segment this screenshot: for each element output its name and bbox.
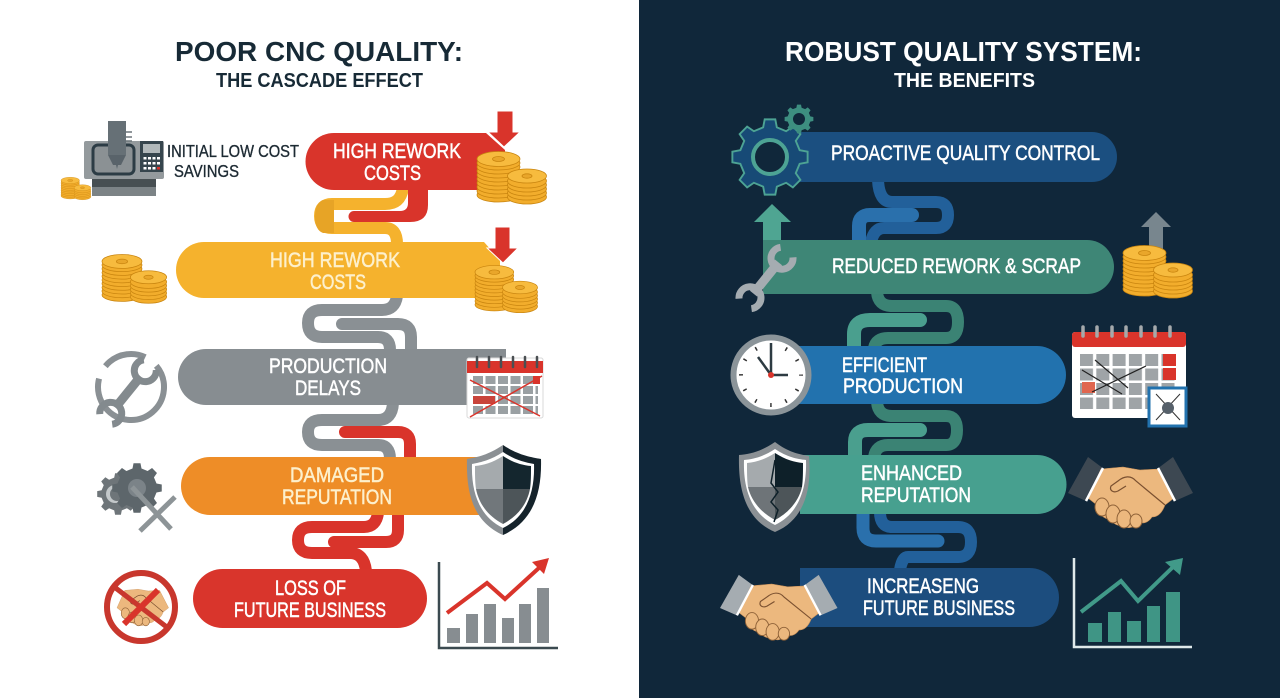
connector: gray return	[342, 324, 411, 350]
step: increasing future business: FUTURE BUSINESS	[863, 597, 1015, 620]
step: increasing future business: INCREASENG	[867, 575, 979, 598]
connector: blue to green	[859, 180, 948, 242]
step: proactive quality control	[790, 132, 1117, 182]
step: proactive quality control: PROACTIVE QUALITY CONTROL	[831, 142, 1100, 165]
label: initial low cost savings: INITIAL LOW COST	[167, 141, 299, 161]
icon: gears and crossed tools	[97, 463, 175, 531]
chart: falling business bars	[439, 558, 558, 648]
icon: coins left of yellow step	[102, 254, 167, 303]
label: initial low cost savings	[167, 141, 299, 181]
icon: handshake lower	[720, 575, 838, 640]
step: increasing future business	[800, 568, 1059, 627]
title: robust quality system: ROBUST QUALITY SYSTEM:	[785, 36, 1142, 67]
icon: wrench	[737, 245, 795, 311]
icon: coins on yellow step	[475, 265, 538, 313]
step: high rework costs (yellow)	[176, 242, 500, 298]
panel: robust quality system	[639, 0, 1280, 698]
step: high rework costs (red): COSTS	[364, 162, 421, 185]
chart: rising business bars	[1074, 558, 1192, 647]
connector: gray to orange	[308, 403, 393, 459]
title: robust quality system	[785, 36, 1142, 92]
connector: green to blue	[854, 292, 958, 348]
step: high rework costs (yellow): HIGH REWORK	[270, 249, 400, 272]
step: efficient production: EFFICIENT	[842, 354, 927, 377]
step: damaged reputation: DAMAGED	[290, 464, 384, 487]
step: high rework costs (red): HIGH REWORK	[333, 140, 461, 163]
step: production delays: PRODUCTION	[269, 355, 387, 378]
icon: up arrow gray	[1141, 212, 1171, 250]
title: poor CNC quality: THE CASCADE EFFECT	[216, 70, 423, 92]
icon: no handshake	[107, 573, 175, 641]
icon: down arrow on yellow step	[487, 227, 518, 263]
step: production delays: DELAYS	[295, 377, 361, 400]
icon: up arrow green	[754, 204, 791, 262]
connector: yellow to gray	[308, 296, 397, 350]
connector: teal to dark blue	[863, 512, 971, 570]
step: efficient production	[795, 346, 1066, 404]
step: loss of future business	[193, 569, 427, 628]
title: robust quality system: THE BENEFITS	[894, 70, 1035, 92]
icon: coins	[1123, 246, 1192, 298]
icon: crossed-out calendar	[467, 357, 543, 418]
icon: coins on red step	[477, 152, 546, 204]
icon: CNC machine	[84, 121, 164, 196]
icon: cracked shield	[739, 442, 810, 532]
step: reduced rework and scrap: REDUCED REWORK & SCRAP	[832, 255, 1081, 278]
title: poor CNC quality	[175, 36, 463, 92]
step: loss of future business: LOSS OF	[275, 577, 346, 600]
icon: small coins	[61, 177, 91, 200]
icon: handshake right	[1068, 457, 1193, 528]
icon: clock	[734, 338, 808, 412]
step: enhanced reputation	[800, 455, 1066, 514]
icon: wrench in ring	[85, 341, 177, 433]
step: high rework costs (yellow): COSTS	[310, 271, 366, 294]
step: loss of future business: FUTURE BUSINESS	[234, 599, 386, 622]
panel: poor CNC quality	[0, 0, 639, 698]
connector: red into orange	[345, 432, 410, 459]
title: poor CNC quality: POOR CNC QUALITY:	[175, 36, 463, 67]
connector: red to yellow	[315, 188, 428, 244]
step: efficient production: PRODUCTION	[843, 375, 963, 398]
step: damaged reputation	[181, 457, 500, 515]
step: production delays	[178, 349, 506, 405]
step: reduced rework and scrap	[763, 240, 1114, 294]
step: enhanced reputation: REPUTATION	[861, 484, 971, 507]
connector: orange to red	[298, 513, 398, 571]
icon: gears	[732, 105, 813, 195]
icon: calendar with checklist	[1072, 327, 1186, 426]
step: damaged reputation: REPUTATION	[282, 486, 392, 509]
step: enhanced reputation: ENHANCED	[861, 462, 962, 485]
icon: shield dark	[467, 445, 541, 535]
icon: down arrow on red step	[488, 111, 520, 147]
step: high rework costs (red)	[306, 133, 505, 190]
label: initial low cost savings: SAVINGS	[174, 161, 239, 181]
connector: blue to teal	[855, 402, 957, 457]
